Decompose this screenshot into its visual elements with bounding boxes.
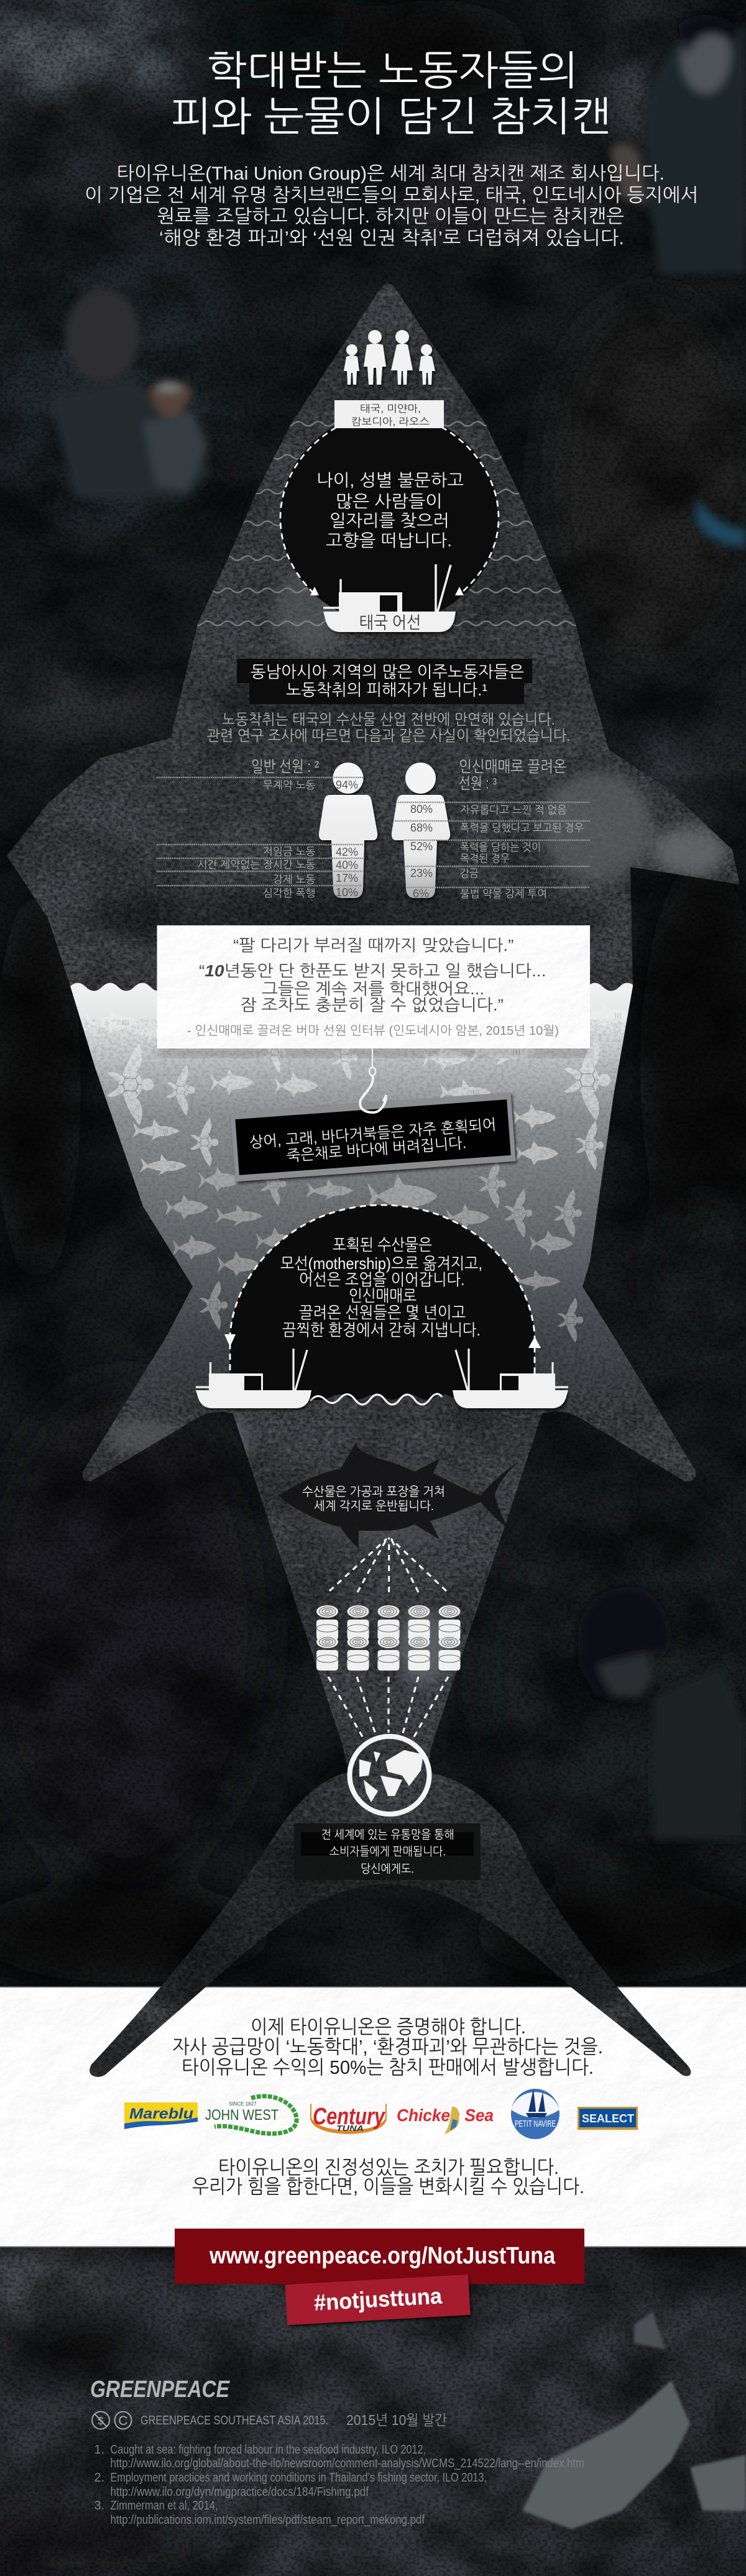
migration text: 고향을 떠납니다.	[326, 531, 452, 550]
migration text: 나이, 성별 불문하고	[316, 471, 464, 490]
labels: trafficked crew: 폭력을 당하는 것이	[460, 841, 541, 853]
mothership text: 어선은 조업을 이어갑니다.	[299, 1270, 465, 1289]
logo: Mareblu: Mareblu	[129, 2106, 193, 2122]
intro paragraph: 타이유니온(Thai Union Group)은 세계 최대 참치캔 제조 회사입니다.	[117, 163, 665, 184]
percentages: ordinary crew	[336, 779, 358, 899]
percentages: trafficked crew: 23%	[410, 867, 433, 879]
panel: consumers text box: 전 세계에 있는 유통망을 통해	[321, 1828, 454, 1842]
wavy water lines in fish head	[197, 421, 576, 632]
banner: campaign URL	[175, 2229, 584, 2284]
arrowhead right	[455, 587, 464, 595]
icon: Thai fishing boat: 태국 어선	[359, 613, 421, 632]
panel: crew testimony quote: “팔 다리가 부러질 때까지 맞았습니다.”	[233, 936, 513, 955]
logo: Chicken of the Sea: Chicken Sea	[397, 2106, 494, 2125]
callout: bycatch sign: 죽은채로 바다에 버려집니다.	[286, 1135, 467, 1165]
mothership text: 끔찍한 환경에서 갇혀 지냅니다.	[282, 1321, 481, 1339]
labels: trafficked crew: 불법 약물 강제 투여	[460, 888, 547, 900]
icons: no commercial and copyright: C	[118, 2414, 128, 2428]
text: sincere action needed: 우리가 힘을 합한다면, 이들을 변화시킬 수 있습니다.	[192, 2176, 584, 2198]
labels: ordinary crew: 시간 제약없는 장시간 노동	[198, 859, 316, 871]
label: origin countries	[334, 400, 444, 428]
labels: trafficked crew	[460, 804, 584, 900]
references: http://publications.iom.int/system/files/pdf/steam_report_mekong.pdf	[111, 2513, 425, 2527]
labels: trafficked crew: 목격된 경우	[460, 853, 510, 864]
panel: white paper call to action	[0, 1986, 746, 2247]
photo: fisherman top right	[609, 15, 746, 273]
panel: crew testimony quote: 잠 조차도 충분히 잘 수 없었습니다.”	[240, 996, 504, 1014]
logo: Mareblu	[124, 2102, 198, 2129]
labels: ordinary crew	[198, 779, 316, 899]
icon: family of four	[344, 330, 435, 385]
panel: tuna silhouette body	[0, 280, 746, 2088]
marine animals lower	[165, 1159, 583, 1342]
references: http://www.ilo.org/dyn/migpractice/docs/184/Fishing.pdf	[111, 2485, 369, 2499]
intro paragraph: 원료를 조달하고 있습니다. 하지만 이들이 만드는 참치캔은	[157, 206, 624, 227]
icons: no commercial and copyright: $	[98, 2415, 104, 2427]
percentages: ordinary crew: 94%	[336, 779, 358, 791]
heading: trafficked crew: 인신매매로 끌려온	[459, 758, 566, 776]
panel: crew testimony quote: 그들은 계속 저를 학대했어요...	[262, 979, 484, 998]
arrowhead up	[528, 1337, 541, 1348]
labels: ordinary crew: 무계약 노동	[263, 779, 316, 791]
mothership text: 끌려온 선원들은 몇 년이고	[299, 1303, 466, 1322]
text: exploitation intro	[206, 712, 571, 745]
icon: fishing boat left	[196, 1349, 311, 1408]
migration text	[316, 471, 464, 550]
intro paragraph: 이 기업은 전 세계 유명 참치브랜드들의 모회사로, 태국, 인도네시아 등지에서	[85, 185, 699, 206]
label: origin countries: 태국, 미얀마,	[360, 403, 421, 415]
chart: ordinary crew figure	[157, 758, 377, 899]
arrows: dashed from fish to cans	[329, 1538, 446, 1592]
marine animals upper	[83, 1001, 635, 1176]
logo: Century Tuna: TUNA	[336, 2124, 364, 2133]
callout: bycatch sign	[231, 1093, 515, 1181]
mothership text	[280, 1235, 482, 1339]
mothership text: 포획된 수산물은	[333, 1235, 432, 1254]
icon: fishing boat right	[453, 1349, 568, 1408]
logo: Petit Navire	[511, 2089, 560, 2139]
percentages: ordinary crew: 17%	[336, 872, 358, 884]
page title	[171, 48, 611, 139]
logo: Sealect: SEALECT	[582, 2112, 634, 2125]
panel: consumers text box: 당신에게도.	[361, 1863, 414, 1876]
intro paragraph: ‘해양 환경 파괴’와 ‘선원 인권 착취’로 더럽혀져 있습니다.	[159, 228, 624, 249]
logo: Greenpeace: GREENPEACE	[90, 2377, 230, 2403]
icon: globe	[349, 1736, 429, 1814]
arrows: dashed from cans to globe	[328, 1677, 448, 1739]
text: exploitation intro: 관련 연구 조사에 따르면 다음과 같은 사실이 확인되었습니다.	[206, 728, 571, 745]
icon: fish hook	[360, 1048, 386, 1112]
text: sincere action needed	[192, 2157, 584, 2198]
credit line: 2015년 10월 발간	[346, 2412, 447, 2428]
heading box: migrant workers: 노동착취의 피해자가 됩니다.¹	[286, 681, 487, 699]
banner: hashtag: #notjusttuna	[313, 2283, 443, 2316]
labels: ordinary crew: 심각한 폭행	[263, 887, 316, 899]
references	[94, 2443, 584, 2527]
page title: 학대받는 노동자들의	[207, 48, 578, 93]
credit line: GREENPEACE SOUTHEAST ASIA 2015.	[140, 2414, 328, 2427]
logo: Century Tuna: Century	[313, 2104, 386, 2130]
icon: stacked tuna cans	[316, 1605, 460, 1671]
percentages: trafficked crew: 52%	[410, 840, 433, 853]
migration text: 일자리를 찾으러	[329, 511, 449, 530]
text: Thai Union must prove	[172, 2016, 603, 2078]
panel: crew testimony quote: “10년동안 단 한푼도 받지 못하고 일 했습니다...	[199, 961, 546, 980]
labels: ordinary crew: 강제 노동	[273, 874, 316, 886]
icon: tuna silhouette with processing text: 수산물은 가공과 포장을 거쳐	[302, 1485, 445, 1499]
logo: Petit Navire: PETIT NAVIRE	[515, 2119, 556, 2129]
percentages: trafficked crew	[410, 803, 433, 900]
icon: tuna silhouette with processing text: 세계 각지로 운반됩니다.	[314, 1500, 434, 1513]
chart: trafficked crew figure	[392, 758, 590, 900]
references: Caught at sea: fighting forced labour in the seafood industry, ILO 2012,	[111, 2443, 426, 2457]
photo: fisherman left holding bowl	[50, 289, 211, 497]
labels: trafficked crew: 폭력을 당했다고 보고된 경우	[460, 822, 584, 834]
labels: trafficked crew: 감금	[460, 868, 479, 879]
percentages: ordinary crew: 10%	[336, 886, 358, 899]
logo: Sealect	[578, 2107, 638, 2132]
heading: trafficked crew: 선원 : ³	[459, 775, 497, 792]
panel: consumers text box	[294, 1823, 481, 1880]
text: Thai Union must prove: 타이유니온 수익의 50%는 참치 판매에서 발생합니다.	[182, 2056, 594, 2078]
percentages: ordinary crew: 42%	[336, 846, 358, 858]
percentages: trafficked crew: 6%	[413, 887, 429, 900]
references: 3.	[94, 2499, 104, 2513]
percentages: ordinary crew: 40%	[336, 859, 358, 871]
logo: Chicken of the Sea	[397, 2106, 494, 2134]
arrowhead left	[310, 587, 319, 595]
icon: tuna silhouette with processing text	[279, 1443, 521, 1549]
panel: mothership transfer dome	[224, 1205, 541, 1406]
wave between boats	[310, 1394, 442, 1405]
mothership text: 인신매매로	[349, 1286, 417, 1305]
percentages: trafficked crew: 68%	[410, 822, 433, 834]
text: Thai Union must prove: 이제 타이유니온은 증명해야 합니다.	[251, 2016, 526, 2038]
panel: ocean with water surface	[37, 983, 684, 1423]
labels: ordinary crew: 저임금 노동	[263, 846, 316, 858]
text: Thai Union must prove: 자사 공급망이 ‘노동학대’, ‘환경파괴’와 무관하다는 것을.	[172, 2036, 603, 2058]
panel: crew testimony quote: - 인신매매로 끌려온 버마 선원 인터뷰 (인도네시아 암본, 2015년 10월)	[187, 1024, 559, 1038]
icons: no commercial and copyright	[92, 2411, 132, 2429]
text: exploitation intro: 노동착취는 태국의 수산물 산업 전반에 만연해 있습니다.	[222, 712, 555, 728]
percentages: trafficked crew: 80%	[410, 803, 433, 815]
references: Employment practices and working conditions in Thailand’s fishing sector, ILO 2013,	[111, 2471, 487, 2485]
callout: bycatch sign: 상어, 고래, 바다거북들은 자주 혼획되어	[249, 1116, 497, 1152]
panel: consumers text box: 소비자들에게 판매됩니다.	[329, 1846, 446, 1858]
label: origin countries: 캄보디아, 라오스	[351, 416, 430, 428]
logo: John West	[205, 2096, 297, 2134]
panel: crew testimony quote	[157, 925, 590, 1056]
logo: John West: JOHN WEST	[205, 2107, 279, 2124]
heading box: migrant workers	[237, 659, 532, 704]
heading box: migrant workers: 동남아시아 지역의 많은 이주노동자들은	[251, 662, 524, 681]
references: 1.	[94, 2443, 104, 2457]
references: 2.	[94, 2471, 104, 2485]
arrowhead down	[224, 1334, 236, 1347]
references: http://www.ilo.org/global/about-the-ilo/newsroom/comment-analysis/WCMS_214522/lang--en/index.htm	[111, 2457, 584, 2470]
intro paragraph	[85, 163, 699, 249]
banner: campaign URL: www.greenpeace.org/NotJustTuna	[209, 2243, 556, 2269]
text: sincere action needed: 타이유니온의 진정성있는 조치가 필요합니다.	[218, 2157, 559, 2178]
heading: ordinary crew: 일반 선원 : ²	[251, 758, 319, 776]
migration text: 많은 사람들이	[336, 492, 443, 511]
logo: John West: SINCE 1827	[229, 2101, 257, 2107]
heading: trafficked crew	[459, 758, 566, 792]
photo: boy lower right	[578, 1587, 746, 1840]
mothership text: 모선(mothership)으로 옮겨지고,	[280, 1254, 482, 1273]
references: Zimmerman et al, 2014,	[111, 2499, 218, 2513]
icon: Thai fishing boat	[323, 564, 456, 632]
labels: trafficked crew: 자유롭다고 느낀 적 없음	[460, 804, 567, 816]
page title: 피와 눈물이 담긴 참치캔	[171, 94, 611, 139]
banner: hashtag	[285, 2275, 471, 2325]
panel: migration dashed circle	[280, 412, 499, 623]
credit line	[140, 2412, 447, 2428]
